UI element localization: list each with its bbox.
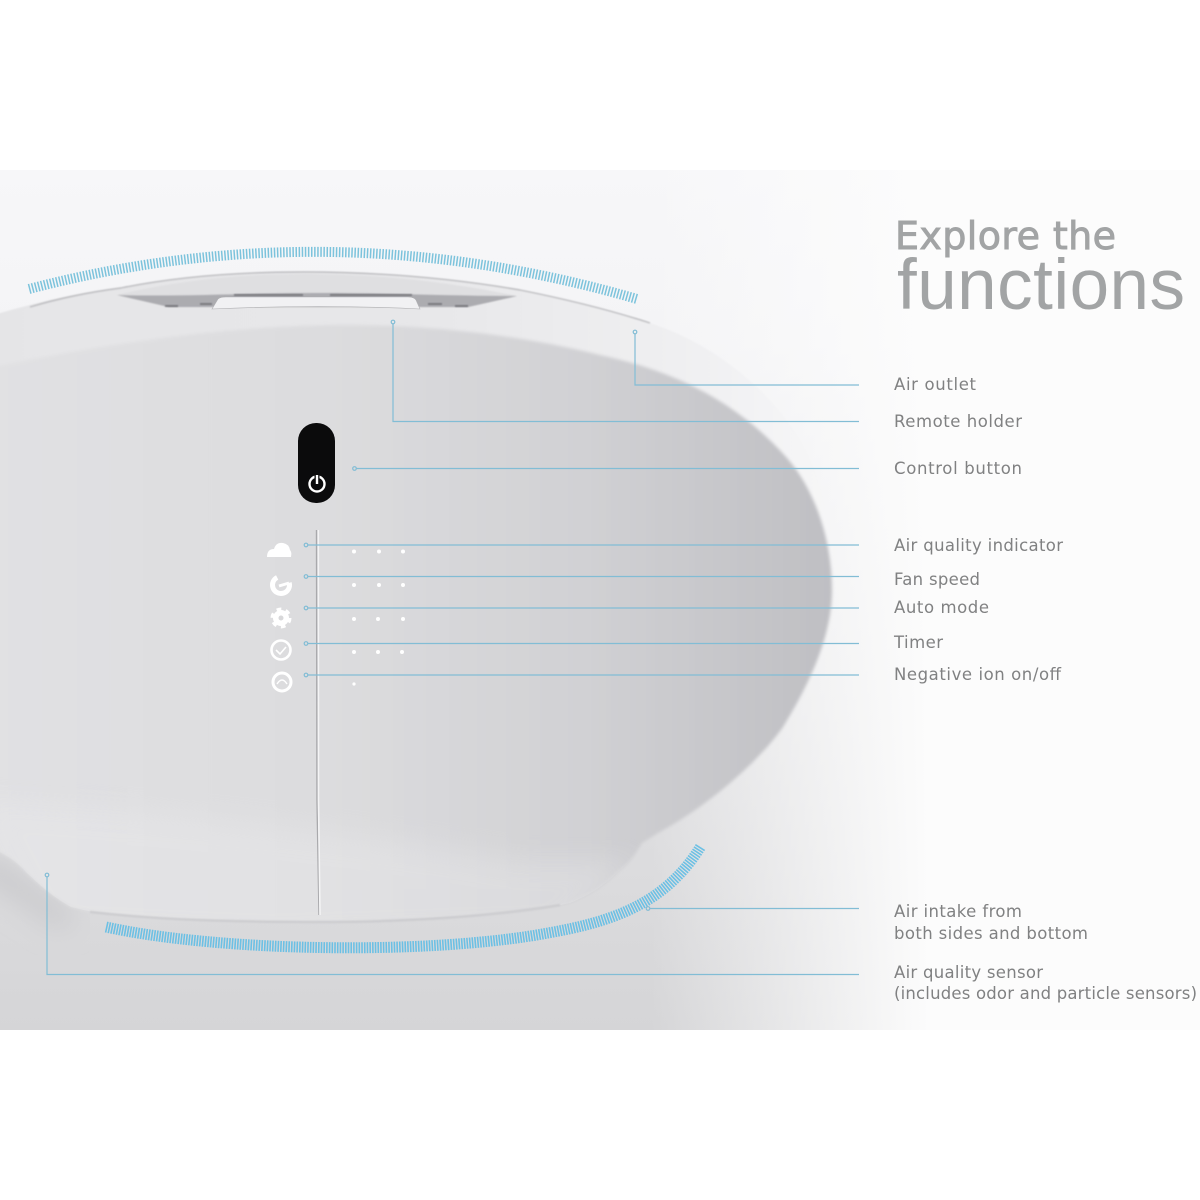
face lower highlight — [477, 875, 592, 908]
line: air quality indicator — [304, 543, 859, 547]
indicator dots — [352, 550, 405, 686]
line: air outlet — [633, 330, 859, 385]
labels — [893, 375, 1197, 1003]
line: negative ion — [304, 673, 859, 677]
side shadow under body — [0, 859, 60, 918]
line: air intake — [646, 907, 859, 910]
label: timer: Timer — [893, 633, 943, 652]
icon: cloud — [267, 543, 291, 557]
line: air quality sensor — [45, 873, 859, 974]
callout lines — [45, 320, 859, 974]
label: air quality indicator: Air quality indicator — [894, 536, 1063, 555]
label: air intake: both sides and bottom — [894, 924, 1088, 943]
line: fan speed — [304, 575, 859, 578]
remote holder — [212, 297, 420, 309]
line: remote holder — [391, 320, 859, 422]
icon: control button — [298, 423, 335, 503]
label: air intake — [894, 902, 1088, 943]
line: auto mode — [304, 606, 859, 610]
label: air quality sensor: (includes odor and particle sensors) — [894, 984, 1197, 1003]
label: air outlet: Air outlet — [894, 375, 977, 394]
shell top edge — [30, 272, 650, 323]
title: functions — [897, 246, 1185, 325]
label: remote holder: Remote holder — [894, 412, 1022, 431]
icon: fan — [271, 575, 291, 595]
purifier front face — [78, 326, 834, 886]
face bottom shadow — [90, 905, 560, 922]
line: timer — [304, 642, 859, 645]
purifier top shell — [0, 273, 606, 366]
air flow arc: outlet — [29, 252, 637, 299]
label: control button: Control button — [894, 459, 1022, 478]
line: control button — [353, 467, 859, 470]
panel: product photo background — [0, 171, 894, 1030]
air outlet slot — [118, 282, 516, 310]
label: air intake: Air intake from — [894, 902, 1022, 921]
label: negative ion: Negative ion on/off — [894, 665, 1062, 684]
air flow arc: intake — [106, 846, 701, 948]
center seam — [316, 530, 320, 915]
icon: gear — [272, 610, 290, 626]
icon: negative ion — [273, 673, 291, 691]
label: air quality sensor — [894, 963, 1197, 1003]
title: Explore the — [895, 214, 1116, 258]
label: air quality sensor: Air quality sensor — [894, 963, 1043, 982]
label: auto mode: Auto mode — [894, 598, 989, 617]
icon: timer — [272, 640, 290, 660]
right side fade — [708, 344, 930, 1030]
label: fan speed: Fan speed — [894, 570, 980, 589]
